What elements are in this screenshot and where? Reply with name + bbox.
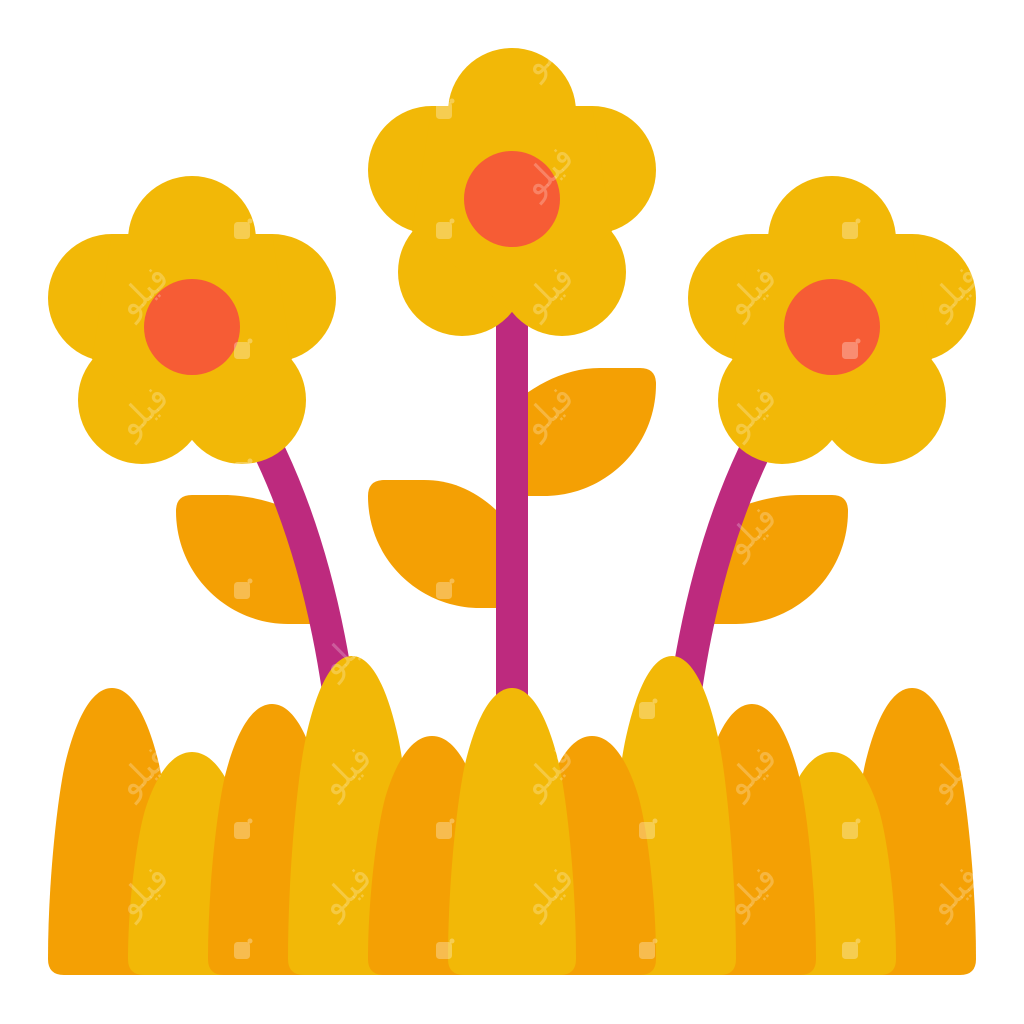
watermark text: فيلو: [513, 858, 582, 926]
flower: right: [688, 176, 976, 464]
flower: centre: [368, 48, 656, 336]
watermark text: [108, 18, 988, 926]
watermark text: فيلو: [716, 858, 785, 926]
watermark icons: [234, 98, 860, 959]
stem: centre: [496, 300, 528, 700]
watermark text: فيلو: [919, 738, 988, 806]
watermark text: فيلو: [108, 378, 177, 446]
grass: [48, 656, 976, 975]
watermark text: فيلو: [108, 738, 177, 806]
watermark text: فيلو: [716, 498, 785, 566]
stem: right: [686, 437, 762, 690]
watermark text: فيلو: [919, 858, 988, 926]
watermark text: فيلو: [108, 858, 177, 926]
leaf: centre right: [520, 368, 656, 496]
leaf: centre left: [368, 480, 504, 608]
watermark text: فيلو: [311, 858, 380, 926]
watermark text: فيلو: [716, 738, 785, 806]
watermark text: فيلو: [513, 258, 582, 326]
leaf: left flower: [176, 495, 315, 624]
leaf: right flower: [709, 495, 848, 624]
watermark text: فيلو: [513, 18, 582, 86]
watermark text: فيلو: [311, 618, 380, 686]
watermark text: فيلو: [716, 258, 785, 326]
watermark text: فيلو: [513, 138, 582, 206]
watermark text: فيلو: [513, 738, 582, 806]
watermark text: فيلو: [716, 378, 785, 446]
watermark text: فيلو: [311, 738, 380, 806]
watermark text: فيلو: [513, 378, 582, 446]
watermark text: فيلو: [108, 258, 177, 326]
flower: left: [48, 176, 336, 464]
watermark text: فيلو: [919, 258, 988, 326]
stem: left: [262, 437, 338, 690]
